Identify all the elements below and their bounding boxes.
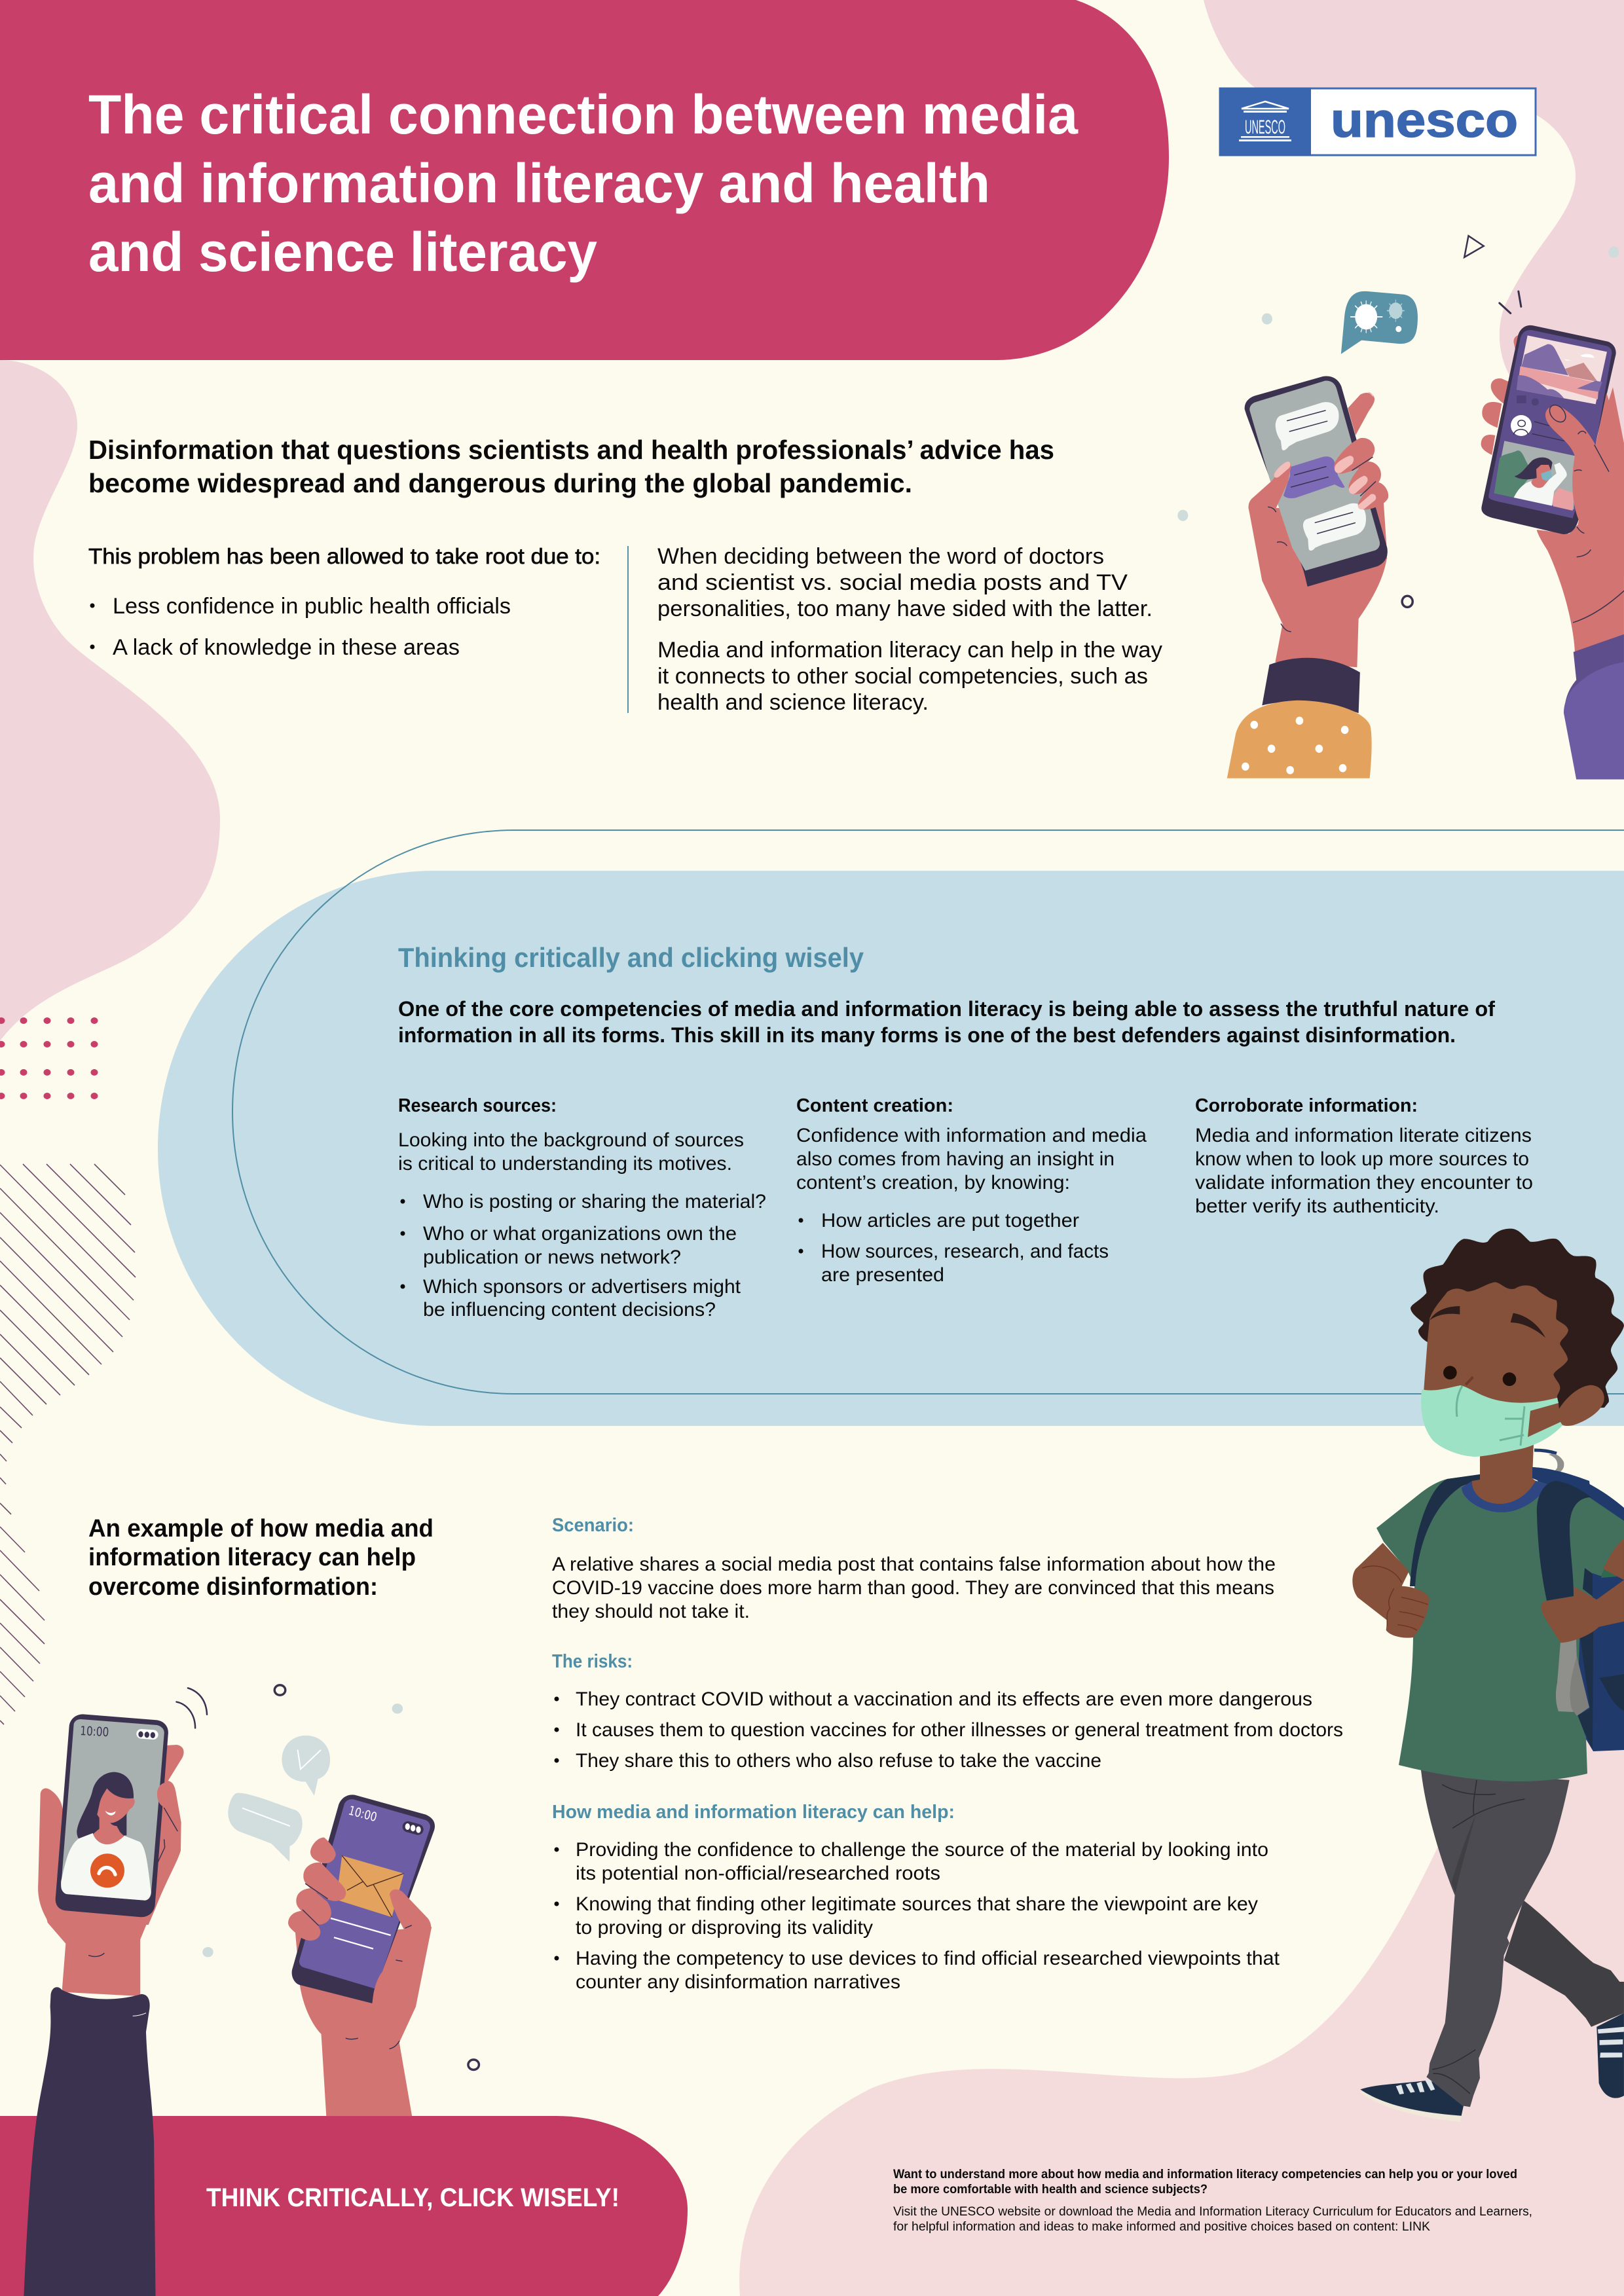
intro right column	[657, 544, 1162, 715]
column: corroborate information: Corroborate information:	[1195, 1095, 1418, 1116]
arms and hands	[1352, 1539, 1624, 1643]
column: corroborate information: Media and information literate citizens	[1195, 1125, 1532, 1146]
intro right column: and scientist vs. social media posts and TV	[657, 570, 1128, 595]
footer note: Want to understand more about how media and information literacy competencies can help you or your loved	[893, 2168, 1517, 2181]
background blob: bottom right pink	[739, 1683, 1624, 2296]
column: corroborate information: know when to look up more sources to	[1195, 1148, 1529, 1170]
intro left column: Less confidence in public health officials	[113, 594, 511, 619]
background blob: top right pink	[1204, 0, 1624, 445]
column: research sources: Which sponsors or advertisers might	[423, 1276, 741, 1298]
panel lead text: information in all its forms. This skill in its many forms is one of the best defenders against disinformation.	[398, 1023, 1456, 1047]
scenario text	[552, 1515, 1276, 1622]
bottom banner	[0, 2116, 688, 2296]
call to action: THINK CRITICALLY, CLICK WISELY!	[206, 2183, 619, 2212]
how literacy can help list	[552, 1802, 1280, 1993]
how literacy can help list: Having the competency to use devices to find official researched viewpoints that	[576, 1948, 1280, 1969]
scenario text: A relative shares a social media post that contains false information about how the	[552, 1554, 1276, 1575]
column: corroborate information	[1195, 1095, 1533, 1217]
intro right column: When deciding between the word of doctors	[657, 544, 1104, 569]
dot grid decoration	[0, 1017, 98, 1099]
example heading	[88, 1515, 434, 1601]
panel lead text: One of the core competencies of media and information literacy is being able to assess the truthful nature of	[398, 997, 1495, 1021]
risks list	[552, 1651, 1343, 1772]
how literacy can help list: counter any disinformation narratives	[576, 1971, 900, 1993]
intro left column: This problem has been allowed to take root due to:	[88, 544, 600, 568]
risks list: They share this to others who also refuse to take the vaccine	[576, 1750, 1101, 1772]
column: corroborate information: validate information they encounter to	[1195, 1172, 1533, 1194]
column: corroborate information: better verify its authenticity.	[1195, 1195, 1439, 1217]
how literacy can help list: How media and information literacy can help:	[552, 1802, 955, 1823]
illustration: hands holding phones (top right)	[1177, 236, 1624, 779]
column: content creation: Content creation:	[796, 1095, 953, 1116]
intro heading: become widespread and dangerous during the global pandemic.	[88, 468, 912, 498]
intro right column: Media and information literacy can help in the way	[657, 638, 1162, 663]
temple emblem	[1239, 101, 1291, 141]
intro right column: health and science literacy.	[657, 690, 929, 715]
decorative shapes and lower arms	[1177, 236, 1624, 779]
how literacy can help list: to proving or disproving its validity	[576, 1917, 873, 1939]
risks list: The risks:	[552, 1651, 633, 1672]
green shirt	[1376, 1474, 1624, 1781]
icon: virus speech bubble	[1341, 291, 1418, 354]
face mask	[1421, 1385, 1562, 1457]
phone time label right: 10:00	[347, 1804, 378, 1825]
footer note: Visit the UNESCO website or download the Media and Information Literacy Curriculum for Educators and Learners,	[893, 2205, 1532, 2219]
example heading: An example of how media and	[88, 1515, 434, 1542]
column: research sources: be influencing content decisions?	[423, 1299, 716, 1321]
intro left column	[88, 544, 600, 660]
hatch line decoration	[0, 1164, 136, 1724]
header banner	[0, 0, 1169, 360]
example heading: information literacy can help	[88, 1544, 416, 1571]
column: content creation: How articles are put together	[821, 1210, 1079, 1231]
head with hair	[1411, 1229, 1624, 1440]
intro heading	[88, 435, 1054, 498]
title: The critical connection between media	[88, 84, 1079, 145]
scenario text: they should not take it.	[552, 1601, 750, 1622]
column: content creation	[796, 1095, 1147, 1286]
decorative shapes, bubbles and lower arms	[24, 1685, 479, 2296]
column: research sources: is critical to understanding its motives.	[398, 1153, 732, 1175]
column: research sources	[398, 1095, 766, 1321]
risks list: It causes them to question vaccines for other illnesses or general treatment from doctors	[576, 1719, 1343, 1741]
column: research sources: publication or news network?	[423, 1247, 681, 1268]
how literacy can help list: Providing the confidence to challenge the source of the material by looking into	[576, 1839, 1268, 1861]
panel heading: Thinking critically and clicking wisely	[398, 942, 864, 973]
intro right column: personalities, too many have sided with the latter.	[657, 596, 1153, 621]
left hand with video call phone	[38, 1714, 184, 1925]
scenario text: Scenario:	[552, 1515, 634, 1536]
illustration: hands with phones (bottom left)	[24, 1685, 479, 2296]
right hand with social feed phone	[1481, 325, 1624, 576]
intro heading: Disinformation that questions scientists and health professionals’ advice has	[88, 435, 1054, 465]
column: content creation: Confidence with information and media	[796, 1125, 1147, 1146]
footer note: for helpful information and ideas to make informed and positive choices based on content: LINK	[893, 2220, 1430, 2234]
left hand with chat phone	[1245, 376, 1388, 589]
how literacy can help list: Knowing that finding other legitimate sources that share the viewpoint are key	[576, 1893, 1258, 1915]
intro right column: it connects to other social competencies, such as	[657, 664, 1148, 689]
legs and shoes	[1359, 1770, 1624, 2122]
temple emblem: UNESCO	[1245, 117, 1285, 138]
title	[88, 84, 1079, 283]
backpack	[1532, 1450, 1624, 1751]
column: research sources: Looking into the background of sources	[398, 1129, 744, 1151]
right hand with mail phone	[288, 1795, 435, 2005]
column: content creation: How sources, research, and facts	[821, 1241, 1109, 1262]
column: content creation: also comes from having an insight in	[796, 1148, 1115, 1170]
panel: thinking critically	[158, 830, 1624, 1426]
footer note	[893, 2168, 1532, 2234]
UNESCO logo	[1219, 88, 1536, 156]
how literacy can help list: its potential non-official/researched roots	[576, 1863, 940, 1884]
column: content creation: content’s creation, by knowing:	[796, 1172, 1070, 1194]
title: and science literacy	[88, 221, 597, 283]
intro left column: A lack of knowledge in these areas	[113, 635, 460, 660]
column: research sources: Research sources:	[398, 1095, 557, 1116]
illustration: boy with mask and backpack	[1352, 1229, 1624, 2122]
column: research sources: Who is posting or sharing the material?	[423, 1191, 766, 1212]
footer note: be more comfortable with health and science subjects?	[893, 2183, 1208, 2196]
background blob: left pink	[0, 360, 220, 1041]
example heading: overcome disinformation:	[88, 1573, 378, 1601]
column: content creation: are presented	[821, 1264, 944, 1286]
straps, collar and neck	[1410, 1444, 1619, 1716]
panel lead text	[398, 997, 1495, 1047]
scenario text: COVID-19 vaccine does more harm than good. They are convinced that this means	[552, 1577, 1274, 1599]
phone time label left: 10:00	[80, 1724, 109, 1740]
column: research sources: Who or what organizations own the	[423, 1223, 737, 1245]
title: and information literacy and health	[88, 153, 990, 214]
icon: end call button	[90, 1853, 124, 1887]
UNESCO logo: unesco	[1331, 93, 1518, 147]
risks list: They contract COVID without a vaccination and its effects are even more dangerous	[576, 1688, 1312, 1710]
